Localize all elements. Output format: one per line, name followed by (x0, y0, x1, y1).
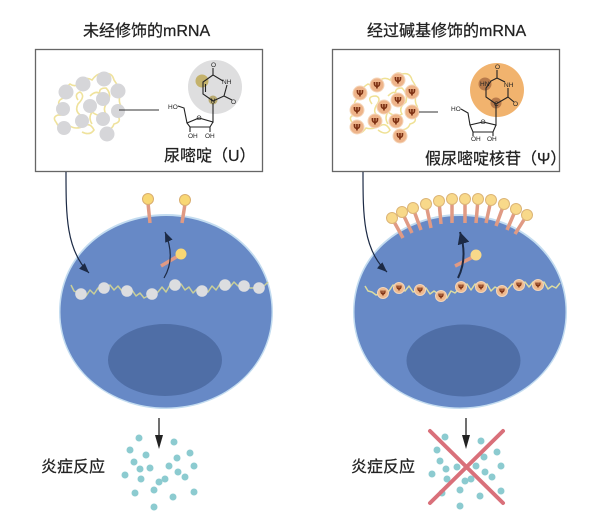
cell: left (59, 194, 273, 409)
icon: uridine molecule: N (210, 98, 216, 105)
internal protein with arrow (161, 232, 186, 278)
arrow: mRNA into left cell (66, 172, 89, 273)
icon: folded mRNA with orange beads: Ψ (392, 118, 400, 128)
icon: pseudouridine molecule: O (495, 64, 500, 71)
panel: uridine (36, 50, 262, 172)
mRNA strand with orange beads: Ψ (499, 288, 505, 296)
icon: folded mRNA with orange beads: Ψ (394, 76, 402, 86)
connector line (119, 109, 159, 111)
icon: pseudouridine molecule: O (480, 119, 486, 126)
dots: cytokines right (428, 434, 504, 510)
icon: pseudouridine molecule: OH (487, 136, 497, 143)
icon: folded mRNA with orange beads: Ψ (394, 96, 402, 106)
panel: pseudouridine (332, 50, 566, 172)
mRNA strand with orange beads (365, 280, 560, 302)
icon: pseudouridine molecule: OH (471, 136, 481, 143)
icon: folded mRNA with orange beads: Ψ (380, 104, 388, 114)
icon: folded mRNA with orange beads: Ψ (371, 118, 379, 128)
mRNA strand with orange beads: Ψ (396, 284, 402, 292)
label: uridine: 尿嘧啶（U） (164, 147, 256, 165)
icon: uridine molecule: OH (188, 133, 198, 140)
label: inflammation right: 炎症反应 (351, 457, 415, 476)
mRNA strand with orange beads: Ψ (438, 292, 444, 300)
icon: pseudouridine molecule (451, 63, 524, 143)
membrane proteins cluster (386, 194, 532, 238)
dots: cytokines left (122, 434, 198, 510)
icon: folded mRNA with orange beads (350, 73, 419, 143)
arrow: left cell down (155, 418, 163, 449)
mRNA strand with orange beads: Ψ (458, 284, 464, 292)
icon: folded mRNA with orange beads: Ψ (373, 82, 381, 92)
icon: uridine molecule: HO (168, 104, 178, 111)
arrow: mRNA into right cell (363, 172, 387, 272)
icon: uridine molecule (168, 60, 242, 140)
nucleus (108, 324, 222, 396)
red cross (430, 431, 503, 503)
icon: folded mRNA with orange beads: Ψ (408, 88, 416, 98)
mRNA strand with orange beads: Ψ (535, 282, 541, 290)
label: pseudouridine: 假尿嘧啶核苷（Ψ） (425, 150, 566, 168)
mRNA strand with orange beads: Ψ (380, 290, 386, 298)
mRNA strand with orange beads: Ψ (417, 286, 423, 294)
icon: uridine molecule: OH (205, 133, 215, 140)
connector line (419, 111, 438, 113)
icon: pseudouridine molecule: HO (451, 106, 461, 113)
icon: pseudouridine molecule: HN (480, 81, 490, 88)
internal protein with bold arrow (455, 232, 482, 278)
icon: folded mRNA with grey beads (54, 72, 126, 142)
mRNA strand with grey beads (71, 279, 268, 300)
mRNA strand with orange beads: Ψ (516, 282, 522, 290)
arrow: right cell down (462, 418, 470, 449)
icon: uridine molecule: NH (222, 79, 232, 86)
icon: uridine molecule: O (211, 62, 216, 69)
icon: pseudouridine molecule: O (513, 101, 518, 108)
mRNA strand with orange beads: Ψ (478, 284, 484, 292)
label: inflammation left: 炎症反应 (41, 457, 105, 476)
icon: folded mRNA with orange beads: Ψ (408, 108, 416, 118)
cell: right (353, 194, 567, 409)
title: unmodified mRNA: 未经修饰的mRNA (83, 22, 210, 40)
icon: uridine molecule: O (196, 115, 202, 122)
icon: folded mRNA with orange beads: Ψ (353, 106, 361, 116)
icon: pseudouridine molecule: C (494, 101, 499, 108)
icon: uridine molecule: O (231, 99, 236, 106)
icon: folded mRNA with orange beads: Ψ (353, 124, 361, 134)
membrane proteins (142, 194, 190, 223)
nucleus (406, 324, 520, 396)
icon: pseudouridine molecule: NH (504, 82, 514, 89)
icon: folded mRNA with orange beads: Ψ (356, 90, 364, 100)
icon: folded mRNA with orange beads: Ψ (396, 132, 404, 142)
title: base-modified mRNA: 经过碱基修饰的mRNA (367, 22, 526, 40)
